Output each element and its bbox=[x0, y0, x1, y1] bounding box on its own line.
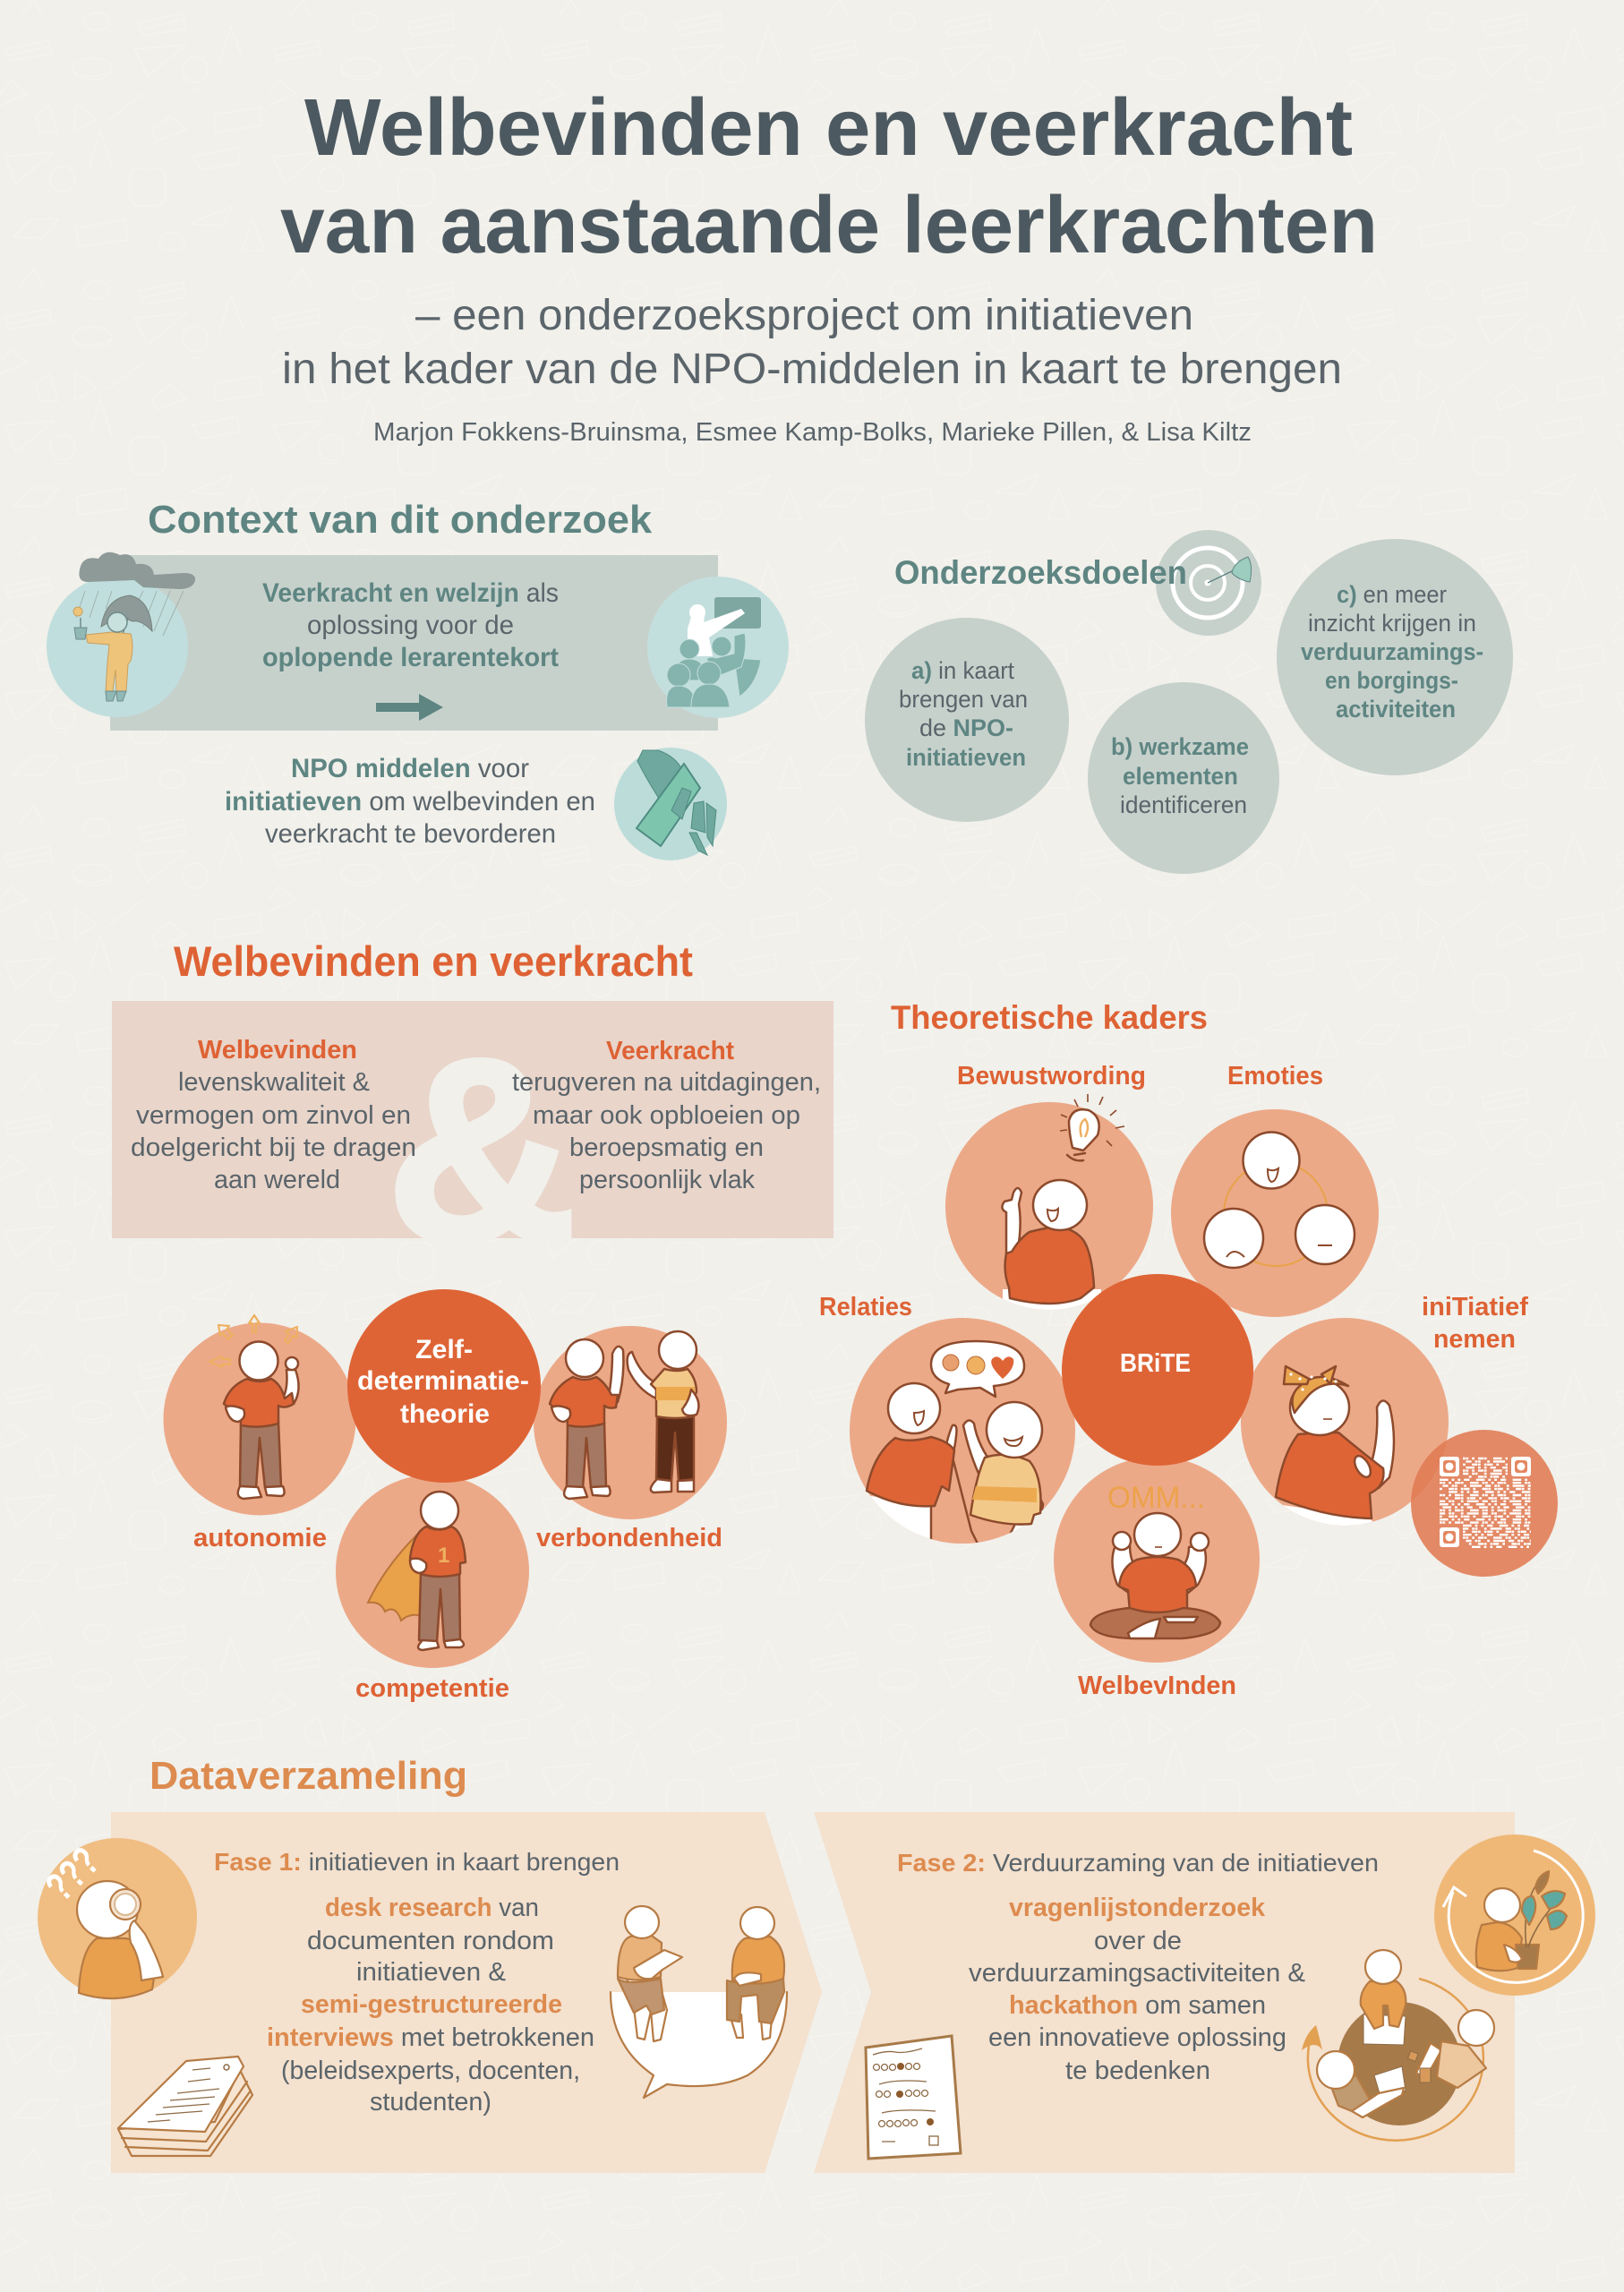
goal b: identificeren bbox=[1120, 791, 1247, 818]
icon: person with plant bbox=[1434, 1834, 1595, 1996]
circle: competentie figure bbox=[336, 1475, 529, 1668]
label: relaties: Relaties bbox=[819, 1293, 912, 1321]
text: veerkracht definition: maar ook opbloeien op bbox=[533, 1101, 800, 1130]
text: fase 2 bbox=[897, 1849, 1379, 2085]
text: fase 1: desk research van bbox=[325, 1894, 539, 1922]
goal c: en borgings- bbox=[1325, 667, 1458, 694]
title bbox=[280, 83, 1378, 270]
text: veerkracht definition: Veerkracht bbox=[606, 1037, 734, 1065]
heading: dataverzameling: Dataverzameling bbox=[150, 1754, 467, 1798]
goal c bbox=[1277, 539, 1513, 775]
label: verbondenheid: verbondenheid bbox=[536, 1524, 722, 1552]
circle: welbevinden meditation figure: OMM... bbox=[1107, 1481, 1205, 1515]
heading: onderzoeksdoelen: Onderzoeksdoelen bbox=[894, 554, 1187, 591]
goal a: de NPO- bbox=[919, 714, 1013, 741]
text: fase 1 bbox=[214, 1848, 620, 2117]
circle: verbondenheid figures bbox=[534, 1326, 727, 1519]
circle: welbevinden meditation figure bbox=[1054, 1457, 1260, 1663]
text: welbevinden definition: Welbevinden bbox=[198, 1036, 357, 1065]
text: fase 1: (beleidsexperts, docenten, bbox=[281, 2057, 580, 2085]
text: fase 1: initiatieven & bbox=[356, 1958, 506, 1987]
circle: emoties faces bbox=[1171, 1109, 1379, 1317]
text: fase 2: vragenlijstonderzoek bbox=[1009, 1894, 1266, 1922]
icon: interview in speech bubble bbox=[611, 1906, 787, 2098]
QR code bbox=[1411, 1430, 1558, 1577]
icon: person with magnifying glass bbox=[36, 1837, 197, 1998]
text: context statement bbox=[262, 578, 559, 672]
text: fase 1: studenten) bbox=[370, 2088, 491, 2117]
text: welbevinden definition: vermogen om zinvol en bbox=[136, 1101, 411, 1130]
goal c: c) en meer bbox=[1337, 581, 1447, 608]
panel: fase 1 arrow bbox=[111, 1812, 822, 2173]
heading: theoretische kaders: Theoretische kaders bbox=[891, 999, 1208, 1036]
text: NPO middelen: veerkracht te bevorderen bbox=[265, 819, 556, 849]
text: fase 1: Fase 1: initiatieven in kaart brengen bbox=[214, 1848, 620, 1876]
icon: person with magnifying glass: ??? bbox=[36, 1837, 108, 1910]
panel: definitions band bbox=[112, 1001, 833, 1238]
circle: autonomie figure bbox=[163, 1315, 356, 1515]
text: welbevinden definition: doelgericht bij te dragen bbox=[131, 1133, 416, 1162]
circle: relaties figures bbox=[850, 1318, 1075, 1549]
circle: competentie figure: 1 bbox=[438, 1544, 449, 1568]
label: emoties: Emoties bbox=[1227, 1062, 1323, 1090]
text: fase 1: semi-gestructureerde bbox=[301, 1990, 562, 2019]
label: bewustwording: Bewustwording bbox=[957, 1062, 1146, 1090]
text: context statement: oplopende lerarentekort bbox=[262, 643, 559, 672]
icon: person with umbrella in rain bbox=[47, 552, 195, 717]
text: veerkracht definition: persoonlijk vlak bbox=[579, 1166, 755, 1194]
text: fase 2: verduurzamingsactiviteiten & bbox=[969, 1959, 1305, 1988]
label: autonomie: autonomie bbox=[193, 1524, 327, 1552]
goal b: b) werkzame bbox=[1111, 733, 1249, 760]
text: fase 2: te bedenken bbox=[1065, 2057, 1210, 2085]
goal a: a) in kaart bbox=[911, 657, 1014, 684]
goal a bbox=[865, 618, 1069, 822]
circle: BRiTE: BRiTE bbox=[1120, 1349, 1191, 1378]
text: fase 1: interviews met betrokkenen bbox=[267, 2023, 594, 2052]
circle: zelfdeterminatietheorie: theorie bbox=[400, 1399, 490, 1429]
icon: hackathon round table bbox=[1302, 1950, 1494, 2141]
circle: zelfdeterminatietheorie: determinatie- bbox=[357, 1366, 529, 1396]
text: NPO middelen: NPO middelen voor bbox=[291, 754, 529, 783]
icon: classroom with teacher bbox=[647, 577, 789, 718]
goal b bbox=[1088, 682, 1279, 874]
text: fase 2: over de bbox=[1094, 1927, 1182, 1955]
text: context statement: oplossing voor de bbox=[307, 611, 514, 640]
label: initiatief nemen: iniTiatief bbox=[1422, 1293, 1528, 1321]
text: fase 2: hackathon om samen bbox=[1009, 1991, 1266, 2020]
goal c: activiteiten bbox=[1336, 696, 1456, 723]
subtitle: – een onderzoeksproject om initiatieven bbox=[415, 292, 1193, 339]
label: competentie: competentie bbox=[355, 1674, 509, 1703]
circle: bewustwording figure bbox=[945, 1094, 1153, 1316]
panel: fase 2 arrow bbox=[814, 1812, 1515, 2173]
goal c: inzicht krijgen in bbox=[1308, 610, 1476, 637]
text: fase 1: documenten rondom bbox=[307, 1927, 554, 1955]
goal c: verduurzamings- bbox=[1301, 638, 1483, 665]
authors: Marjon Fokkens-Bruinsma, Esmee Kamp-Bolks, Marieke Pillen, & Lisa Kiltz bbox=[373, 418, 1252, 447]
label: initiatief nemen: nemen bbox=[1433, 1325, 1516, 1354]
text: NPO middelen bbox=[225, 754, 595, 849]
text: fase 2: een innovatieve oplossing bbox=[988, 2023, 1286, 2052]
text: veerkracht definition: beroepsmatig en bbox=[569, 1133, 764, 1162]
subtitle bbox=[282, 292, 1342, 393]
icon: stack of papers bbox=[118, 2057, 252, 2156]
circle: zelfdeterminatietheorie bbox=[347, 1289, 541, 1483]
title: Welbevinden en veerkracht bbox=[304, 83, 1353, 173]
label: welbevinden: WelbevInden bbox=[1078, 1672, 1236, 1700]
text: welbevinden definition bbox=[131, 1036, 416, 1194]
title: van aanstaande leerkrachten bbox=[280, 181, 1378, 270]
goal a: initiatieven bbox=[906, 744, 1026, 771]
circle: BRiTE bbox=[1062, 1274, 1253, 1466]
heading: welbevinden en veerkracht: Welbevinden en veerkracht bbox=[174, 937, 693, 985]
text: welbevinden definition: aan wereld bbox=[214, 1166, 340, 1194]
goal a: brengen van bbox=[899, 686, 1028, 713]
goal b: elementen bbox=[1123, 763, 1238, 790]
text: fase 2: Fase 2: Verduurzaming van de initiatieven bbox=[897, 1849, 1379, 1877]
icon: hands with money bbox=[614, 748, 727, 860]
arrow bbox=[376, 694, 443, 721]
circle: initiatief figure bbox=[1241, 1318, 1449, 1531]
text: veerkracht definition: terugveren na uitdagingen, bbox=[512, 1068, 821, 1097]
icon: questionnaire bbox=[866, 2036, 961, 2159]
text: welbevinden definition: levenskwaliteit & bbox=[178, 1068, 370, 1097]
subtitle: in het kader van de NPO-middelen in kaart te brengen bbox=[282, 346, 1342, 393]
ampersand: & bbox=[387, 1005, 577, 1296]
circle: zelfdeterminatietheorie: Zelf- bbox=[415, 1335, 473, 1364]
text: veerkracht definition bbox=[512, 1037, 821, 1194]
text: NPO middelen: initiatieven om welbevinden en bbox=[225, 787, 595, 817]
text: context statement: Veerkracht en welzijn als bbox=[262, 578, 559, 608]
heading: context: Context van dit onderzoek bbox=[148, 498, 653, 542]
label: initiatief nemen bbox=[1422, 1293, 1528, 1354]
icon: target with dart bbox=[1156, 530, 1261, 636]
panel: context band bbox=[110, 555, 718, 731]
